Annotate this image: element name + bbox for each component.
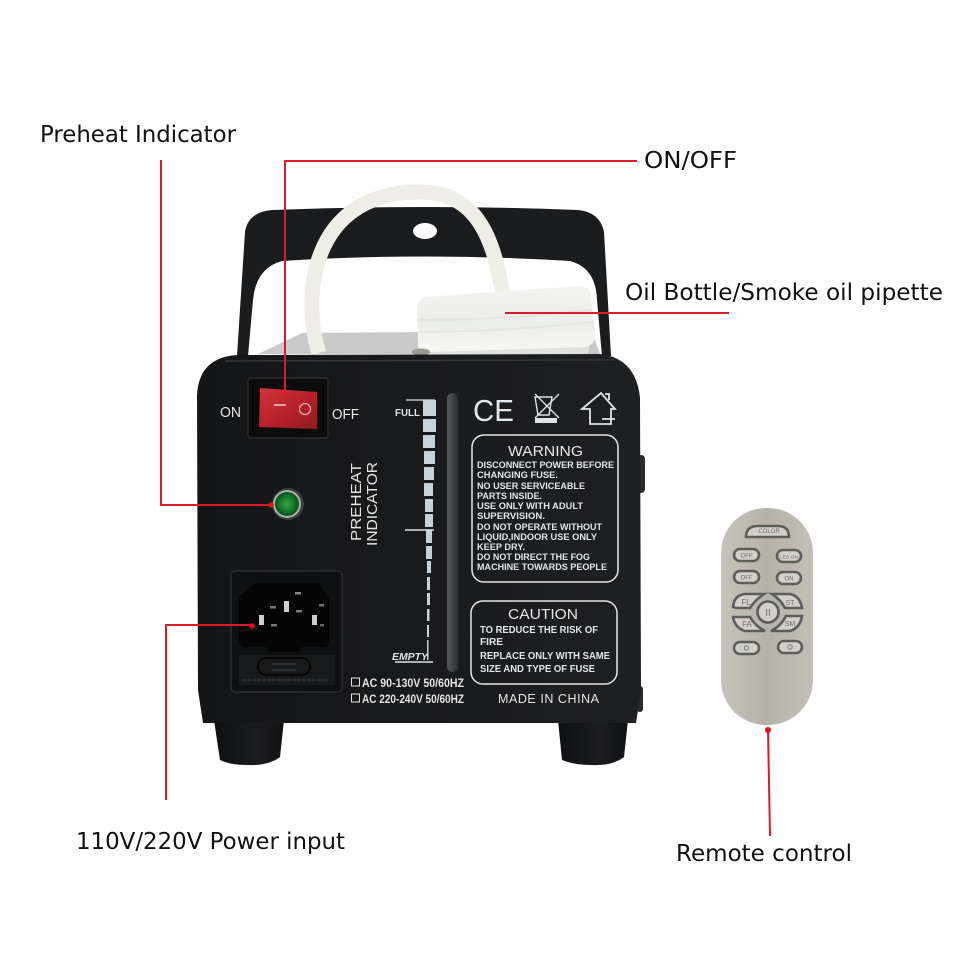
mode buttons: FA (742, 620, 753, 629)
smoke oil pipette tube (312, 192, 503, 353)
preheat indicator text (349, 462, 381, 546)
label: on/off: ON/OFF (644, 148, 737, 174)
label: oil bottle: Oil Bottle/Smoke oil pipette (625, 280, 943, 306)
warning panel: MACHINE TOWARDS PEOPLE (477, 562, 608, 573)
leader: preheat indicator (161, 160, 274, 508)
warning panel: DISCONNECT POWER BEFORE (477, 460, 615, 471)
warning panel: PARTS INSIDE. (477, 491, 542, 502)
switch labels: OFF (332, 406, 359, 423)
voltage options: AC 220-240V 50/60HZ (362, 694, 464, 706)
button rows: OFF (740, 576, 753, 582)
button rows: LED ON (780, 554, 798, 560)
caution panel (471, 601, 617, 684)
icon: house (582, 393, 615, 424)
leader: on/off (285, 161, 637, 397)
fog machine (197, 192, 645, 765)
caution panel: CAUTION (508, 606, 578, 623)
leader: remote control (765, 727, 771, 836)
side bumps (637, 455, 645, 712)
warning panel: SUPERVISION. (477, 511, 545, 522)
warning panel: USE ONLY WITH ADULT (477, 501, 583, 512)
caution panel: TO REDUCE THE RISK OF (480, 624, 599, 636)
mode buttons: ST (786, 600, 795, 607)
level window slot (447, 393, 458, 672)
mode buttons: SM (785, 621, 795, 628)
preheat LED (272, 488, 304, 520)
CE mark: CE (473, 393, 514, 428)
icon: crossed bin (535, 394, 559, 423)
switch labels: ON (220, 404, 241, 421)
fluid level scale: EMPTY (392, 652, 429, 663)
fluid level scale: FULL (395, 408, 420, 419)
carry handle (237, 207, 611, 356)
color button (746, 526, 789, 537)
warning panel: WARNING (508, 443, 583, 460)
leader: power input (166, 623, 255, 800)
top edge highlight (225, 360, 615, 361)
button rows (734, 549, 801, 584)
oil bottle cap (417, 286, 595, 354)
warning panel: KEEP DRY. (477, 542, 525, 553)
rocker switch (248, 378, 328, 438)
warning panel: DO NOT OPERATE WITHOUT (477, 522, 602, 533)
mode buttons (733, 594, 802, 631)
preheat indicator text: INDICATOR (365, 462, 381, 546)
warning panel: DO NOT DIRECT THE FOG (477, 552, 590, 563)
label: remote control: Remote control (676, 841, 852, 867)
mode buttons: FL (741, 598, 751, 607)
label: preheat indicator: Preheat Indicator (40, 122, 237, 148)
machine top surface (258, 332, 600, 354)
warning panel: CHANGING FUSE. (477, 470, 558, 481)
screw (412, 348, 430, 356)
brightness buttons (734, 641, 802, 654)
made in china: MADE IN CHINA (498, 692, 600, 706)
button rows: ON (784, 576, 794, 582)
button rows: OFF (740, 554, 753, 560)
caution panel: REPLACE ONLY WITH SAME (480, 650, 610, 662)
feet (214, 720, 628, 765)
machine body (197, 354, 641, 723)
label: power input: 110V/220V Power input (76, 829, 345, 855)
voltage options (352, 678, 464, 706)
switch labels (220, 404, 359, 423)
fluid level scale (392, 400, 436, 663)
leader: oil bottle (505, 312, 729, 314)
caution panel: SIZE AND TYPE OF FUSE (480, 663, 595, 675)
warning panel: LIQUID,INDOOR USE ONLY (477, 532, 598, 543)
warning panel (472, 435, 618, 582)
mode buttons: II (765, 608, 771, 619)
caution panel: FIRE (480, 636, 503, 648)
power socket module (231, 571, 342, 692)
color button: COLOR (758, 529, 780, 535)
remote control (721, 508, 813, 725)
warning panel: NO USER SERVICEABLE (477, 481, 586, 492)
remote body (721, 508, 813, 725)
voltage options: AC 90-130V 50/60HZ (362, 678, 464, 690)
preheat indicator text: PREHEAT (349, 463, 365, 541)
